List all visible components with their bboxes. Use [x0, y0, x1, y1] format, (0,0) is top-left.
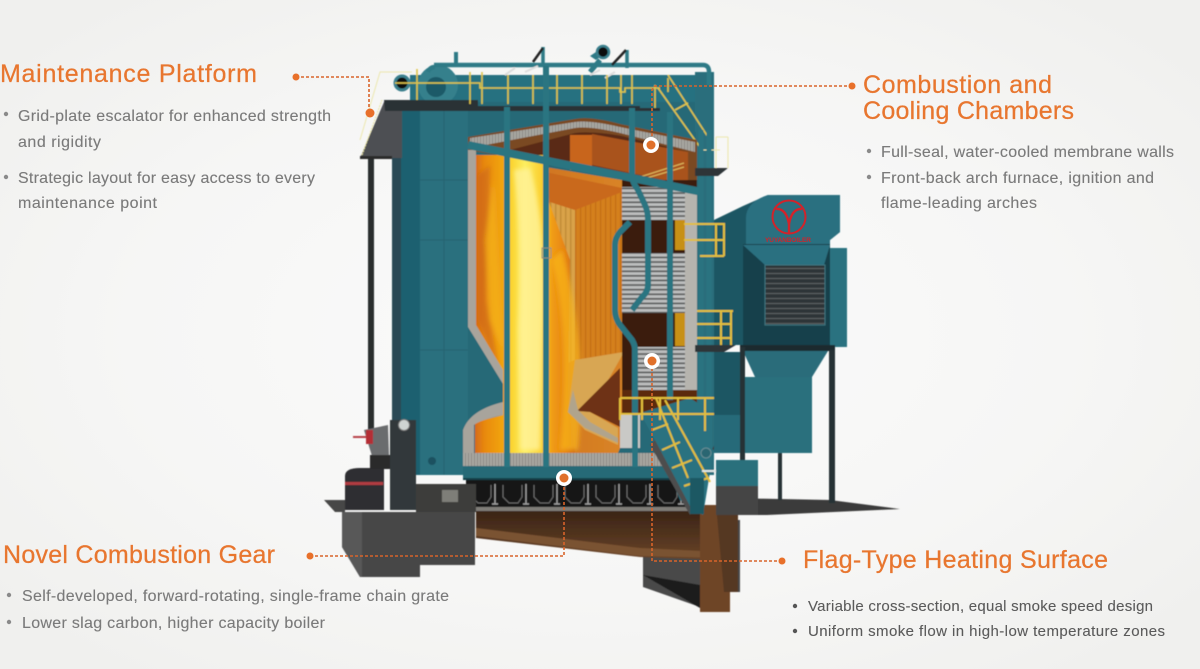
left wall refractory	[468, 150, 503, 384]
text block: novel combustion gear: Self-developed, forward-rotating, single-frame chain grate	[22, 588, 449, 605]
ceiling	[545, 172, 622, 210]
callout line: combustion gear	[306, 470, 572, 560]
side railings	[684, 168, 736, 352]
top drum band	[395, 46, 714, 132]
flame	[475, 155, 575, 453]
text block: maintenance platform: Grid-plate escalator for enhanced strength	[18, 108, 331, 125]
text block: flag-type heating surface	[793, 546, 1165, 640]
text block: maintenance platform	[0, 60, 331, 212]
furnace fill	[475, 155, 622, 453]
cross beam	[468, 145, 702, 192]
main body	[392, 100, 714, 475]
bottom band	[463, 453, 663, 466]
vertical pipes	[507, 66, 709, 473]
right chamber: flag tube banks	[622, 180, 697, 415]
back wall ribs	[550, 202, 575, 370]
text block: combustion and cooling chambers: flame-leading arches	[881, 195, 1037, 212]
callout line: maintenance platform	[292, 74, 374, 118]
text block: flag-type heating surface: Uniform smoke flow in high-low temperature zones	[808, 623, 1165, 640]
yellow railing top	[395, 69, 728, 168]
grille	[765, 265, 825, 325]
refractory arch	[468, 118, 697, 192]
text block: novel combustion gear: Novel Combustion Gear	[3, 541, 275, 569]
ladder and lower platform	[620, 398, 732, 515]
text block: maintenance platform: maintenance point	[18, 195, 158, 212]
furnace cavity	[463, 118, 697, 466]
text block: novel combustion gear	[3, 541, 449, 632]
text block: combustion and cooling chambers: Cooling Chambers	[863, 97, 1074, 125]
logo	[765, 200, 811, 244]
boiler cutaway illustration	[324, 46, 900, 612]
floor plate right	[726, 498, 900, 515]
text block: maintenance platform: Strategic layout for easy access to every	[18, 170, 315, 187]
grate and header	[463, 467, 703, 511]
rear arch	[568, 352, 624, 445]
text block: combustion and cooling chambers: Combustion and	[863, 71, 1052, 99]
text block: flag-type heating surface: Flag-Type Heating Surface	[803, 546, 1108, 574]
callout line: heating surface	[644, 353, 786, 564]
base: concrete foundation	[324, 500, 740, 608]
left support column	[368, 155, 374, 435]
air preheater	[714, 195, 847, 515]
logo: YUYANBOILER	[765, 237, 811, 244]
text block: flag-type heating surface: Variable cross-section, equal smoke speed design	[808, 598, 1153, 615]
text block: maintenance platform: Maintenance Platform	[0, 60, 257, 88]
text block: combustion and cooling chambers: Full-seal, water-cooled membrane walls	[881, 144, 1174, 161]
text block: novel combustion gear: Lower slag carbon, higher capacity boiler	[22, 615, 326, 632]
maintenance platform	[360, 72, 660, 159]
callout line: combustion chambers	[643, 82, 856, 153]
underside brown beams	[476, 505, 738, 612]
text block: maintenance platform: and rigidity	[18, 134, 101, 151]
burner and front fittings	[345, 420, 476, 512]
text block: combustion and cooling chambers: Front-back arch furnace, ignition and	[881, 170, 1154, 187]
text block: combustion and cooling chambers	[863, 71, 1174, 212]
